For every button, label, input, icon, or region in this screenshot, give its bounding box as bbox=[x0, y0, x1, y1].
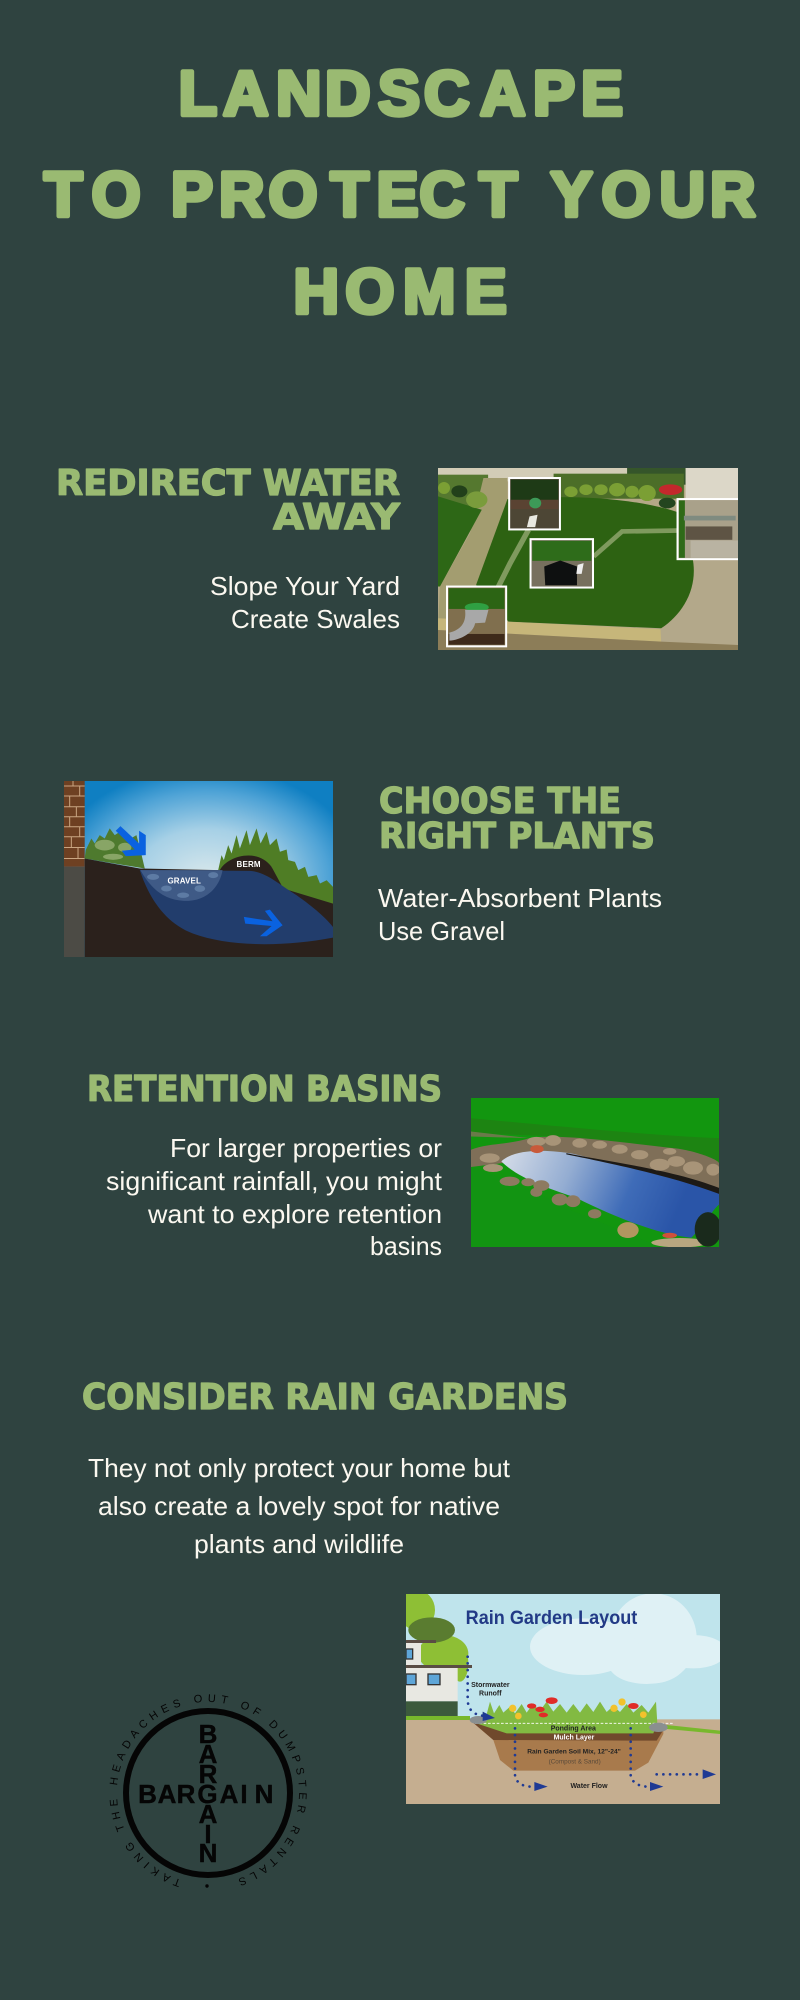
heading: choose the right plants bbox=[379, 781, 655, 857]
text: slope and swales: Slope Your Yard bbox=[210, 571, 400, 601]
text: slope and swales: Create Swales bbox=[231, 604, 400, 634]
bush bbox=[85, 828, 145, 868]
berm grass bbox=[218, 828, 333, 907]
image: berm and gravel diagram: GRAVEL bbox=[167, 877, 201, 886]
image: rain garden layout diagram: Rain Garden Soil Mix, 12"-24" bbox=[527, 1748, 621, 1755]
logo: bargain: TAKING THE HEADACHES OUT OF DUMPSTER RENTALS bbox=[110, 1694, 307, 1887]
logo: bargain: A bbox=[199, 1739, 218, 1769]
logo: bargain: R bbox=[199, 1759, 218, 1789]
logo: bargain: I bbox=[204, 1819, 212, 1849]
heading: choose the right plants: CHOOSE THE bbox=[379, 781, 621, 822]
logo: bargain: A bbox=[199, 1799, 218, 1829]
logo: bargain: N bbox=[199, 1838, 217, 1868]
image: rain garden layout diagram bbox=[406, 1594, 720, 1804]
text: rain garden description bbox=[88, 1453, 511, 1559]
grass bbox=[478, 1702, 657, 1733]
logo: bargain: B bbox=[138, 1779, 157, 1809]
logo: bargain: B bbox=[199, 1719, 217, 1749]
icon: arrow right bbox=[244, 910, 283, 936]
image: rain garden layout diagram: Water Flow bbox=[570, 1783, 608, 1790]
title bbox=[44, 59, 756, 327]
text: rain garden description: also create a lovely spot for native bbox=[98, 1491, 500, 1521]
text: retention description: significant rainfall, you might bbox=[106, 1166, 443, 1196]
text: absorbent plants and gravel: Water-Absorbent Plants bbox=[378, 883, 662, 913]
panel: consider rain gardens bbox=[82, 1377, 720, 1888]
panel: redirect water bbox=[56, 463, 744, 650]
logo: bargain: I bbox=[240, 1779, 248, 1809]
image: berm and gravel diagram bbox=[64, 781, 333, 957]
text: slope and swales bbox=[210, 571, 400, 634]
logo: bargain: A bbox=[220, 1779, 239, 1809]
logo: bargain: G bbox=[197, 1779, 218, 1809]
text: retention description: want to explore retention bbox=[147, 1199, 442, 1229]
image: rain garden layout diagram: (Compost & Sand) bbox=[549, 1758, 601, 1765]
heading: redirect water away: REDIRECT WATER bbox=[56, 463, 400, 504]
icon: arrow down right bbox=[116, 826, 146, 856]
heading: redirect water away: AWAY bbox=[273, 497, 401, 538]
logo: bargain: A bbox=[158, 1779, 177, 1809]
image: rain garden layout diagram: Ponding Area bbox=[551, 1725, 596, 1732]
heading: choose the right plants: RIGHT PLANTS bbox=[379, 816, 655, 857]
text: retention description: For larger properties or bbox=[170, 1133, 442, 1163]
image: rain garden layout diagram: Rain Garden Layout bbox=[466, 1608, 638, 1629]
title: LANDSCAPE bbox=[179, 59, 623, 129]
image: retention pond photo bbox=[471, 1098, 719, 1247]
logo: bargain: N bbox=[255, 1779, 273, 1809]
text: absorbent plants and gravel: Use Gravel bbox=[378, 916, 505, 946]
heading: consider rain gardens: CONSIDER RAIN GARDENS bbox=[82, 1377, 568, 1418]
text: retention description: basins bbox=[370, 1231, 442, 1261]
text: rain garden description: plants and wildlife bbox=[194, 1529, 404, 1559]
logo: bargain: R bbox=[177, 1779, 196, 1809]
title: HOME bbox=[294, 257, 507, 327]
image: rain garden layout diagram: Mulch Layer bbox=[554, 1735, 595, 1742]
image: berm and gravel diagram: BERM bbox=[237, 860, 261, 869]
image: rain garden layout diagram: Stormwater bbox=[471, 1682, 510, 1689]
image: rain garden layout diagram: Runoff bbox=[479, 1691, 502, 1698]
heading: redirect water away bbox=[56, 463, 401, 538]
heading: retention basins: RETENTION BASINS bbox=[87, 1069, 442, 1110]
text: absorbent plants and gravel bbox=[378, 883, 662, 946]
panel: retention basins bbox=[87, 1069, 721, 1261]
panel: choose the right plants bbox=[64, 781, 662, 957]
image: yard drainage photo bbox=[438, 468, 738, 650]
rock rim back bbox=[471, 1137, 719, 1195]
text: retention description bbox=[106, 1133, 443, 1261]
title: TO PROTECT YOUR bbox=[44, 160, 756, 230]
text: rain garden description: They not only protect your home but bbox=[88, 1453, 511, 1483]
